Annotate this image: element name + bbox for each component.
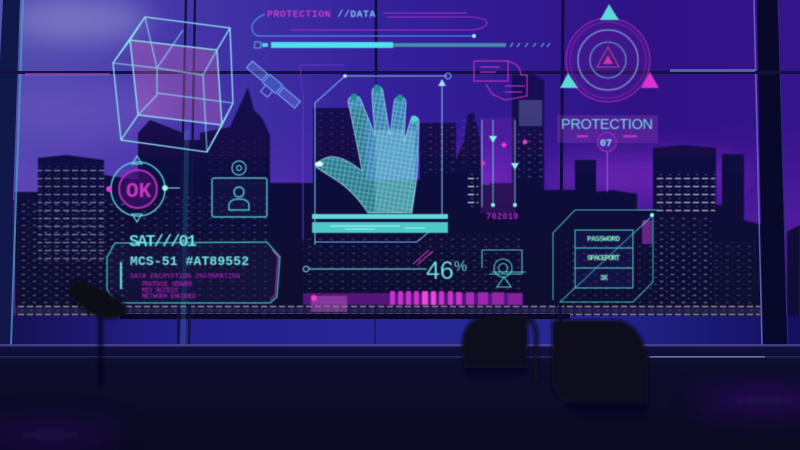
- HUD: hand scan frame: [300, 65, 451, 245]
- label: OK: OK: [126, 181, 152, 204]
- HUD: PROTECTION 07 label: [557, 115, 658, 192]
- HUD: satellite icon: [241, 60, 301, 115]
- HUD: satellite data panel: [107, 233, 280, 303]
- HUD: PROTECTION //DATA header: [252, 9, 550, 48]
- HUD: hand scan base bar: [312, 214, 448, 233]
- text: data encryption note: PROTOCOL SERVER: [142, 281, 192, 288]
- lit building windows: [18, 100, 755, 305]
- HUD: OK status dial: [106, 156, 180, 222]
- window frame: [0, 0, 800, 358]
- text: data encryption note: KEY ACCESS: [142, 287, 178, 294]
- text: header: PROTECTION //DATA: [267, 9, 376, 21]
- text: PROTECTION: PROTECTION: [561, 117, 653, 133]
- foreground: lounge chairs silhouette: [462, 316, 648, 425]
- city lights along the shore: [15, 305, 760, 315]
- text: password rows: 3X: [600, 275, 608, 283]
- HUD: access panel: [553, 210, 658, 302]
- text: data encryption note: [130, 273, 240, 300]
- text: MCS-51 #AT89552: MCS-51 #AT89552: [130, 254, 249, 269]
- text: 46%: %: [454, 258, 467, 275]
- HUD: wireframe cube: [113, 17, 233, 152]
- HUD: magenta device icon: [474, 61, 527, 100]
- HUD: operator monitor icon: [212, 161, 267, 217]
- text: date code: 702019: [486, 212, 518, 222]
- floor: [0, 346, 800, 450]
- text: data encryption note: DATA ENCRYPTION INFORMATION: [130, 273, 240, 280]
- text: 46%: 46: [426, 257, 454, 285]
- HUD: 46 percent readout: [303, 250, 467, 285]
- background: evening sky: [0, 0, 800, 330]
- HUD: wireframe hand: [314, 84, 420, 214]
- foreground: left chair silhouette: [68, 280, 127, 386]
- text: SAT///01: SAT///01: [129, 233, 197, 252]
- text: password rows: [587, 236, 620, 283]
- HUD: signal lines with markers: [480, 118, 528, 222]
- water reflection: [0, 314, 800, 346]
- text: password rows: PASSWORD: [587, 236, 620, 244]
- HUD: magenta data strip: [303, 291, 523, 312]
- text: 07: 07: [600, 139, 612, 150]
- HUD: gear console icon: [482, 250, 526, 287]
- text: password rows: SPACEPORT: [587, 255, 620, 263]
- text: data encryption note: NETWORK ENCODED: [142, 293, 196, 300]
- HUD: radar target: [560, 4, 659, 102]
- progress bar: [254, 42, 550, 48]
- city skyline silhouette: [0, 72, 800, 320]
